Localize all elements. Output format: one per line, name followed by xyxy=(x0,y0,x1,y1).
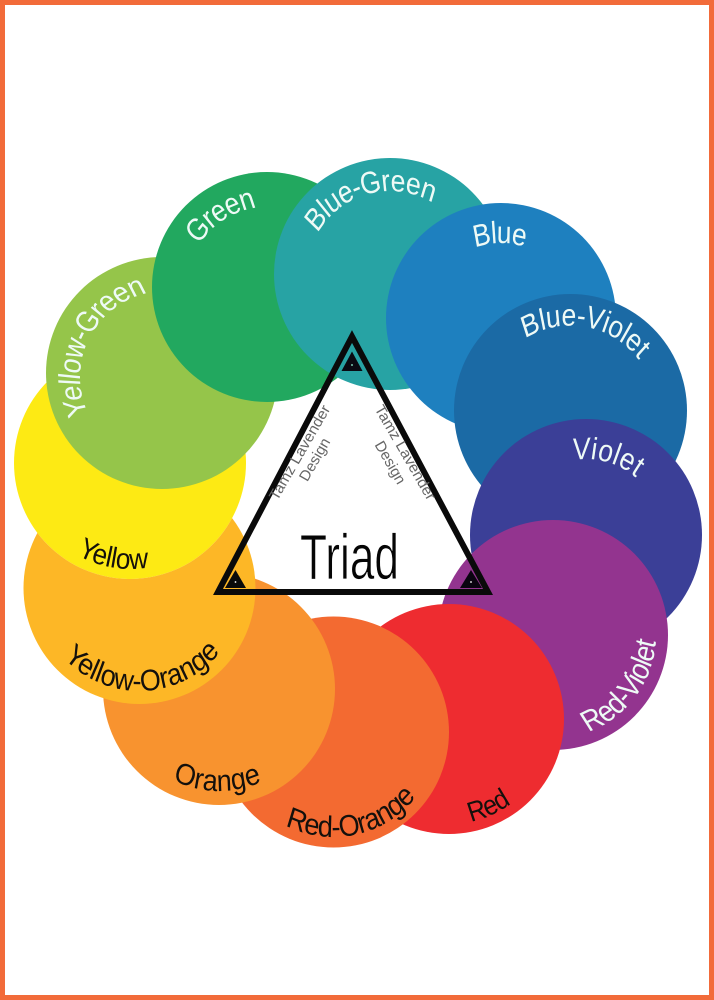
label: Yellow-Orange: Yellow-Orange xyxy=(70,642,218,691)
corner marker: left xyxy=(225,570,246,588)
corner marker: right xyxy=(460,570,482,588)
label: Violet: Violet xyxy=(573,437,644,478)
circle: green xyxy=(152,172,382,402)
label: Yellow-Green: Yellow-Green xyxy=(58,280,146,419)
colour circles xyxy=(14,158,702,848)
label: Yellow: Yellow xyxy=(84,537,148,569)
label: Red-Violet: Red-Violet xyxy=(580,638,656,732)
circle: yellow-orange xyxy=(24,518,256,704)
circle: red-violet xyxy=(438,520,668,750)
corner marker: top xyxy=(342,352,362,371)
triangle: triad marker xyxy=(218,336,488,592)
label: Green: Green xyxy=(187,192,256,240)
circle: yellow-green xyxy=(46,257,278,489)
label: Red: Red xyxy=(467,787,510,822)
heading: Triad: Triad xyxy=(300,521,399,593)
label: Blue: Blue xyxy=(473,220,526,247)
circle: orange xyxy=(103,573,335,805)
circle: blue-violet xyxy=(454,294,687,527)
label: Red-Orange: Red-Orange xyxy=(287,789,414,838)
circle: red-orange xyxy=(218,616,449,848)
circle: violet xyxy=(470,419,702,651)
circle: blue-green xyxy=(274,158,506,390)
circle: yellow xyxy=(14,347,246,579)
label: Orange: Orange xyxy=(176,764,260,796)
credit: left side: Design xyxy=(296,435,334,484)
credit: right side: Design xyxy=(371,438,409,487)
label: Blue-Violet: Blue-Violet xyxy=(520,306,650,360)
label: Blue-Green: Blue-Green xyxy=(304,171,435,232)
credit: right side: Tamz Lavender xyxy=(371,402,439,503)
circle: blue xyxy=(386,203,616,433)
circle: red xyxy=(334,604,564,834)
credit: left side: Tamz Lavender xyxy=(266,402,334,503)
